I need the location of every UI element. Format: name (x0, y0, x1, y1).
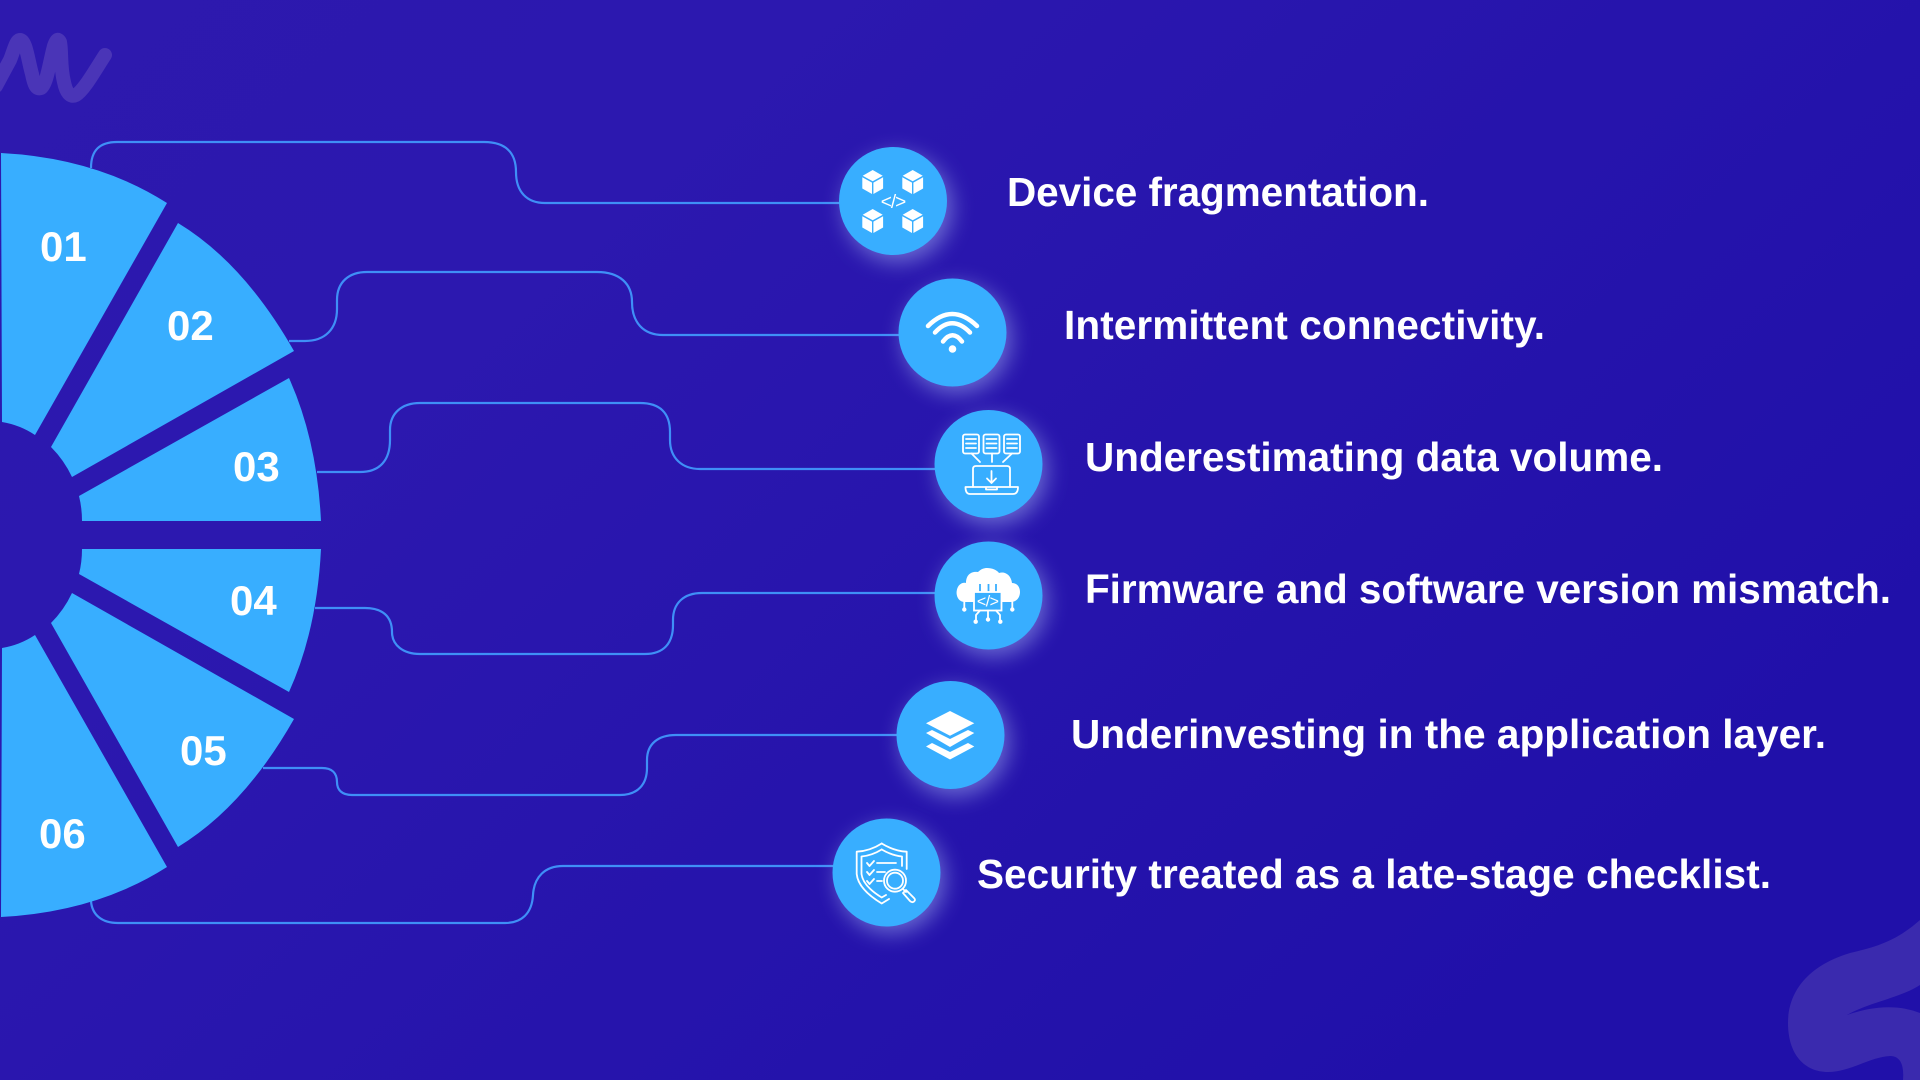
number 06: 06 (39, 810, 86, 857)
segment 04 (79, 549, 321, 692)
number 04: 04 (230, 577, 277, 624)
number 03: 03 (233, 443, 280, 490)
item 5 label: Underinvesting in the application layer. (1071, 711, 1826, 757)
item 4 icon: cloud code chip: </> (977, 594, 999, 610)
number 01: 01 (40, 223, 87, 270)
item 1 label: Device fragmentation. (1007, 169, 1429, 215)
connector 05 (263, 735, 898, 795)
segment 02 (51, 223, 294, 477)
number 02: 02 (167, 302, 214, 349)
segment 05 (51, 593, 294, 847)
segmented half wheel (1, 153, 321, 917)
item 2 label: Intermittent connectivity. (1064, 302, 1545, 348)
number 05: 05 (180, 727, 227, 774)
item 3 icon: documents to laptop (934, 410, 1047, 525)
connector 02 (289, 272, 900, 341)
connector 03 (317, 403, 936, 472)
decorative blob bottom right (1788, 920, 1920, 1080)
decorative squiggle top left (0, 40, 105, 96)
item 6 label: Security treated as a late-stage checklist. (977, 851, 1771, 897)
connector 01 (91, 142, 840, 203)
item 5 icon: layers (896, 681, 1009, 796)
segment 01 (1, 153, 167, 435)
connector lines (91, 142, 936, 923)
segment 03 (79, 378, 321, 521)
item 1 icon: cubes and code: </> (881, 192, 906, 213)
item 1 icon: cubes and code (839, 147, 952, 262)
item 4 label: Firmware and software version mismatch. (1085, 566, 1891, 612)
item 6 icon: shield with magnifier (832, 818, 945, 933)
item 3 label: Underestimating data volume. (1085, 434, 1663, 480)
item 4 icon: cloud code chip (934, 542, 1047, 656)
connector 06 (91, 866, 834, 923)
segment 06 (1, 635, 167, 917)
connector 04 (315, 593, 936, 654)
item 2 icon: wifi (898, 278, 1011, 393)
